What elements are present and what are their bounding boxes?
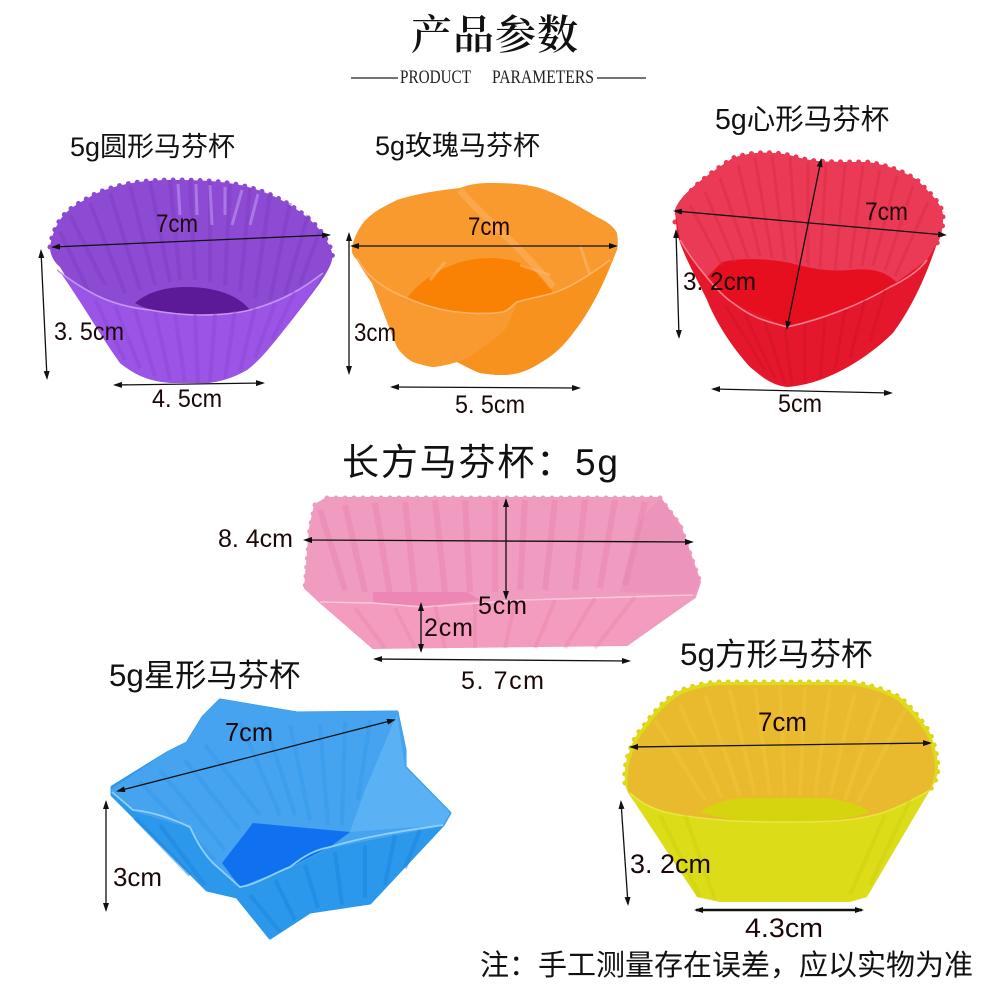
- dimensions: red cup: 3. 2cm: [683, 268, 756, 296]
- dimensions: orange cup: 5. 5cm: [455, 391, 525, 419]
- dimensions: orange cup: [354, 213, 525, 419]
- arrows: yellow cup: [621, 743, 930, 910]
- dimensions: blue cup: 7cm: [225, 717, 273, 747]
- cup: purple round: [50, 180, 332, 383]
- label: heart cup: 5g心形马芬杯: [715, 104, 889, 136]
- dimensions: blue cup: [113, 717, 273, 892]
- dimensions: purple cup: 7cm: [156, 210, 198, 238]
- dimensions: orange cup: 7cm: [468, 213, 510, 241]
- dimensions: purple cup: 3. 5cm: [54, 318, 124, 346]
- dimensions: pink cup: [218, 525, 544, 695]
- dimensions: pink cup: 5cm: [478, 592, 527, 620]
- dimensions: yellow cup: 3. 2cm: [630, 849, 711, 879]
- dimensions: yellow cup: [630, 707, 823, 943]
- dimensions: yellow cup: 7cm: [758, 707, 807, 737]
- dimensions: purple cup: [54, 210, 222, 413]
- dimensions: pink cup: 8. 4cm: [218, 525, 293, 553]
- arrows: orange cup: [349, 234, 616, 388]
- label: rose cup: 5g玫瑰马芬杯: [375, 131, 540, 161]
- subtitle: PRODUCT: [400, 67, 471, 88]
- label: rectangular heading: 长方马芬杯：5g: [342, 442, 618, 483]
- cup: red heart: [675, 153, 943, 387]
- dimensions: purple cup: 4. 5cm: [152, 385, 222, 413]
- arrows: blue cup: [106, 720, 394, 910]
- arrows: purple cup: [41, 235, 329, 385]
- dimensions: red cup: 5cm: [778, 390, 822, 418]
- dimensions: pink cup: 2cm: [424, 614, 473, 642]
- subtitle: PARAMETERS: [492, 67, 594, 88]
- arrows: pink cup: [305, 500, 692, 661]
- label: square cup: 5g方形马芬杯: [680, 636, 873, 672]
- subtitle: [351, 67, 646, 88]
- footnote: 注：手工测量存在误差，应以实物为准: [480, 949, 973, 982]
- dimensions: red cup: 7cm: [865, 198, 908, 226]
- cup: orange rose: [352, 183, 618, 375]
- cup: blue star: [112, 700, 450, 938]
- dimensions: yellow cup: 4.3cm: [745, 913, 823, 943]
- arrows: red cup: [675, 160, 945, 393]
- dimensions: orange cup: 3cm: [354, 319, 396, 347]
- dimensions: red cup: [683, 198, 908, 418]
- label: star cup: 5g星形马芬杯: [109, 658, 300, 693]
- cup: pink rectangular: [305, 498, 700, 648]
- title: 产品参数: [411, 2, 578, 61]
- dimensions: blue cup: 3cm: [113, 862, 162, 892]
- label: round cup: 5g圆形马芬杯: [70, 132, 235, 162]
- dimensions: pink cup: 5. 7cm: [461, 667, 544, 695]
- cup: yellow square: [625, 682, 938, 902]
